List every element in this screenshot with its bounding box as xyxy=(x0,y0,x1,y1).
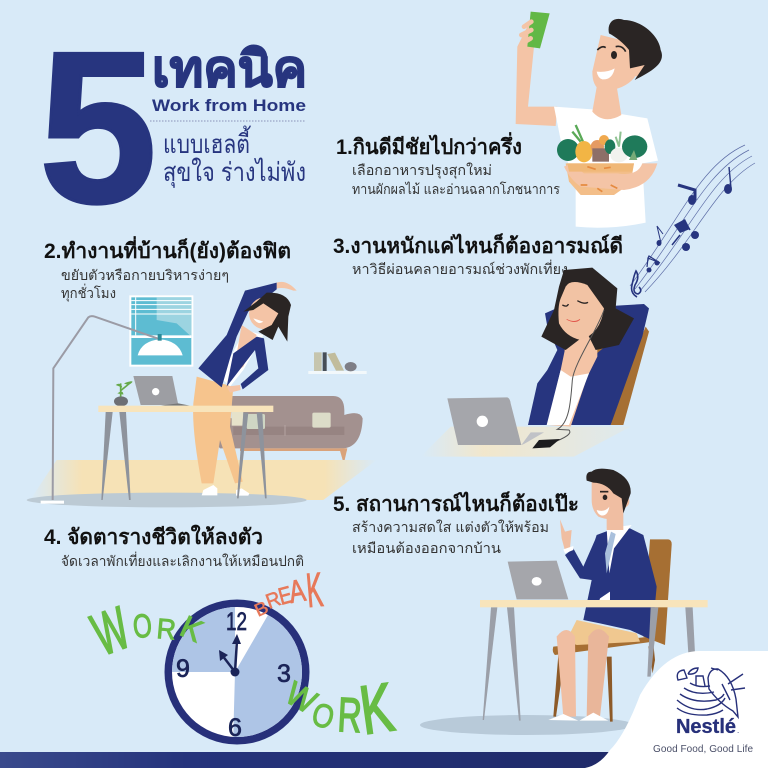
label: WORK left: W xyxy=(84,595,138,669)
label: WORK right xyxy=(279,668,398,749)
clock numerals: 9 xyxy=(176,655,190,683)
tip 2 text: ขยับตัวหรือกายบริหารง่ายๆ xyxy=(61,267,229,283)
shorts xyxy=(567,620,640,645)
front table legs xyxy=(237,413,248,498)
title block xyxy=(39,6,307,248)
label: WORK left: K xyxy=(175,609,209,649)
tip 4 text: จัดเวลาพักเที่ยงและเลิกงานให้เหมือนปกติ xyxy=(61,552,304,569)
plant xyxy=(114,396,128,406)
slogan: Good Food, Good Life xyxy=(653,744,753,755)
tip 1 text: เลือกอาหารปรุงสุกใหม่ xyxy=(352,162,492,179)
label: WORK left xyxy=(84,595,209,669)
tip 2 text xyxy=(44,235,291,302)
window xyxy=(129,295,193,367)
tip 3 text: 3.งานหนักแค่ไหนก็ต้องอารมณ์ดี xyxy=(333,232,623,258)
label: WORK right: W xyxy=(279,674,323,721)
tip 5 text: 5. สถานการณ์ไหนก็ต้องเป๊ะ xyxy=(333,490,579,516)
tip 2 text: 2.ทำงานที่บ้านก็(ยัง)ต้องฟิต xyxy=(44,235,291,263)
tip 5 text xyxy=(333,490,579,556)
Nestle logo: Nestlé xyxy=(676,716,736,738)
music note icons xyxy=(632,167,732,297)
label: WORK right: K xyxy=(355,668,398,749)
tagline line 2: สุขใจ ร่างไม่พัง xyxy=(163,157,306,188)
woman xyxy=(193,377,243,483)
clock sectors xyxy=(172,607,302,737)
Nestle logo xyxy=(653,668,753,755)
legs xyxy=(557,630,576,717)
Nestle logo: . xyxy=(737,726,739,735)
head xyxy=(607,510,623,530)
table top xyxy=(98,406,273,412)
tip 1 text: 1.กินดีมีชัยไปกว่าครึ่ง xyxy=(336,131,522,159)
label: BREAK: K xyxy=(304,564,325,618)
jacket xyxy=(565,528,657,640)
tagline line 1: แบบเฮลตี้ xyxy=(163,125,251,159)
heading: technique: เทคนิค xyxy=(152,41,307,97)
tip 3 text: หาวิธีผ่อนคลายอารมณ์ช่วงพักเที่ยง xyxy=(352,260,568,277)
tip 2 text: ทุกชั่วโมง xyxy=(61,284,116,302)
floor xyxy=(30,460,377,500)
vegetables xyxy=(557,139,579,161)
table xyxy=(480,600,708,607)
table legs xyxy=(101,412,113,500)
laptop xyxy=(447,397,521,445)
label: BREAK: A xyxy=(286,572,308,610)
laptop xyxy=(133,376,178,405)
illustration: woman stretching at desk xyxy=(27,282,377,507)
subheading: Work from Home: Work from Home xyxy=(152,96,306,115)
label: WORK left: R xyxy=(155,612,177,646)
logo panel xyxy=(585,651,768,768)
laptop xyxy=(508,561,568,599)
tip 5 text: เหมือนต้องออกจากบ้าน xyxy=(352,540,501,556)
sofa xyxy=(208,396,363,448)
shelf and books xyxy=(308,371,367,374)
chair xyxy=(643,539,672,645)
clock hands xyxy=(222,640,237,672)
illustration: man at desk with shorts xyxy=(420,469,708,735)
tip 4 text: 4. จัดตารางชีวิตให้ลงตัว xyxy=(44,524,263,549)
clock numerals: 6 xyxy=(228,714,242,742)
illustration: relaxed woman with earphones xyxy=(421,268,649,457)
clock numerals: 3 xyxy=(277,660,291,688)
tip 1 text xyxy=(336,131,560,197)
big number 5: 5 xyxy=(39,6,157,248)
label: BREAK: R xyxy=(263,588,284,614)
clock numerals: 12 xyxy=(226,608,247,636)
tip 1 text: ทานผักผลไม้ และอ่านฉลากโภชนาการ xyxy=(352,181,560,197)
tip 4 text xyxy=(44,524,304,569)
label: WORK left: O xyxy=(132,608,153,646)
staff lines xyxy=(630,145,755,292)
lamp xyxy=(53,316,160,500)
tip 5 text: สร้างความสดใส แต่งตัวให้พร้อม xyxy=(352,519,549,535)
clock xyxy=(164,600,310,745)
phone xyxy=(532,439,560,448)
nest icon xyxy=(677,683,725,715)
tip 3 text xyxy=(333,232,623,277)
label: WORK right: R xyxy=(336,688,363,743)
label: WORK right: O xyxy=(308,697,338,737)
label: BREAK: E xyxy=(275,580,295,610)
bottom bar xyxy=(0,752,620,768)
illustration: man with phone and vegetables xyxy=(516,12,662,228)
clock numerals xyxy=(176,608,291,742)
label: BREAK: B xyxy=(251,597,271,620)
label: BREAK xyxy=(251,564,325,620)
hand xyxy=(560,519,572,551)
